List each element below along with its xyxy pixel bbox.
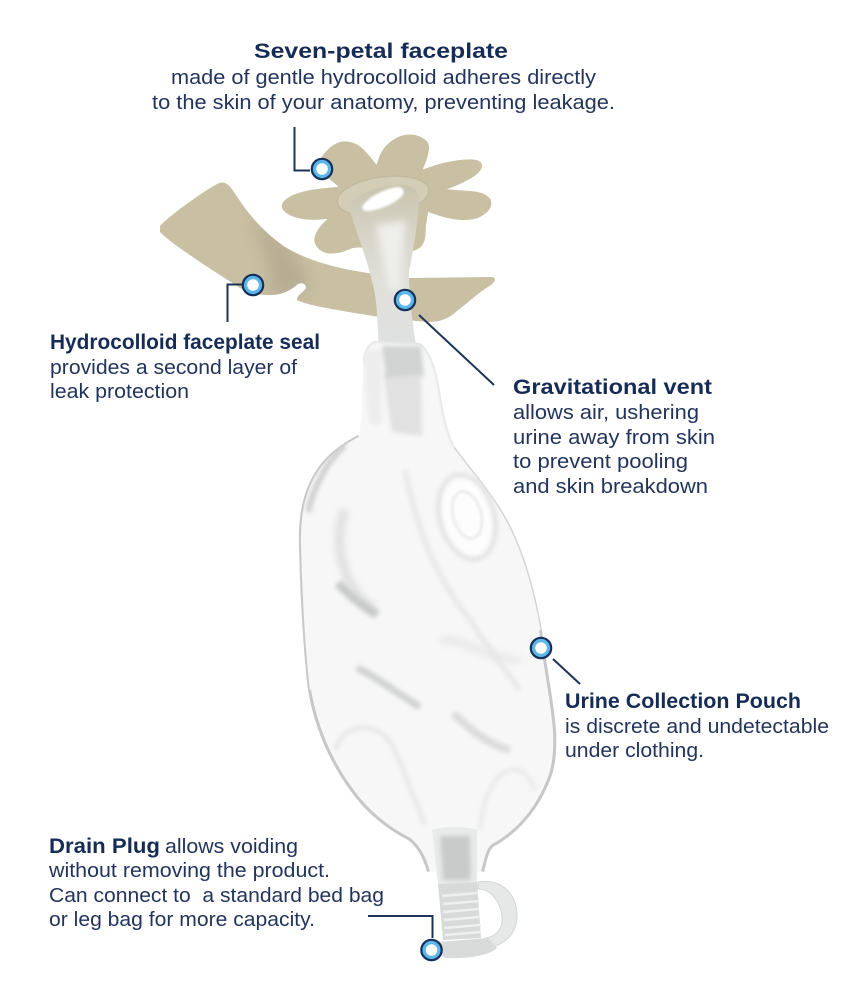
text: urine collection pouch xyxy=(565,689,829,762)
text: drain plug: without removing the product. xyxy=(48,860,330,882)
title: seven-petal faceplate: Seven-petal faceplate xyxy=(254,39,508,63)
tube flange xyxy=(335,171,431,221)
faceplate seal shape xyxy=(160,183,495,322)
seven-petal faceplate shape xyxy=(283,136,490,252)
tube highlight xyxy=(362,187,404,211)
text: gravitational vent: and skin breakdown xyxy=(513,476,708,498)
callout lines xyxy=(228,127,580,938)
text: gravitational vent: urine away from skin xyxy=(513,427,715,449)
text: hydrocolloid faceplate seal xyxy=(50,330,320,403)
text: hydrocolloid faceplate seal: provides a second layer of xyxy=(50,357,297,379)
title: seven-petal faceplate: to the skin of your anatomy, preventing leakage. xyxy=(152,92,615,114)
connector tube xyxy=(335,171,431,348)
tube body xyxy=(349,185,419,348)
marker: pouch xyxy=(531,638,551,658)
text: urine collection pouch: is discrete and undetectable xyxy=(565,716,829,738)
drain thread xyxy=(438,882,481,940)
text: drain plug: Can connect to a standard bed bag xyxy=(49,885,384,907)
text: urine collection pouch: under clothing. xyxy=(565,740,704,762)
text: drain plug: Drain Plug xyxy=(49,834,160,858)
text: gravitational vent xyxy=(513,375,715,498)
text: drain plug: or leg bag for more capacity. xyxy=(49,909,315,931)
text: urine collection pouch: Urine Collection Pouch xyxy=(565,689,801,713)
drain upper collar xyxy=(432,827,477,884)
pouch swirls xyxy=(299,341,556,872)
marker: vent xyxy=(395,290,415,310)
drain base xyxy=(438,938,497,958)
title: seven-petal faceplate xyxy=(152,39,615,114)
marker: drain xyxy=(421,940,442,960)
marker: faceplate xyxy=(312,159,332,179)
seal shading xyxy=(256,225,308,296)
drain plug xyxy=(432,827,517,958)
text: gravitational vent: Gravitational vent xyxy=(513,375,712,399)
text: drain plug xyxy=(48,834,384,931)
text: gravitational vent: to prevent pooling xyxy=(513,451,688,473)
drain loop xyxy=(478,881,517,948)
urine collection pouch xyxy=(299,341,556,872)
text: drain plug: allows voiding xyxy=(165,836,298,858)
text: hydrocolloid faceplate seal: Hydrocolloid faceplate seal xyxy=(50,330,320,354)
text: gravitational vent: allows air, ushering xyxy=(513,402,699,424)
text: hydrocolloid faceplate seal: leak protection xyxy=(50,381,189,403)
title: seven-petal faceplate: made of gentle hydrocolloid adheres directly xyxy=(171,67,596,89)
tube shading xyxy=(376,220,406,290)
marker: seal xyxy=(243,275,263,295)
